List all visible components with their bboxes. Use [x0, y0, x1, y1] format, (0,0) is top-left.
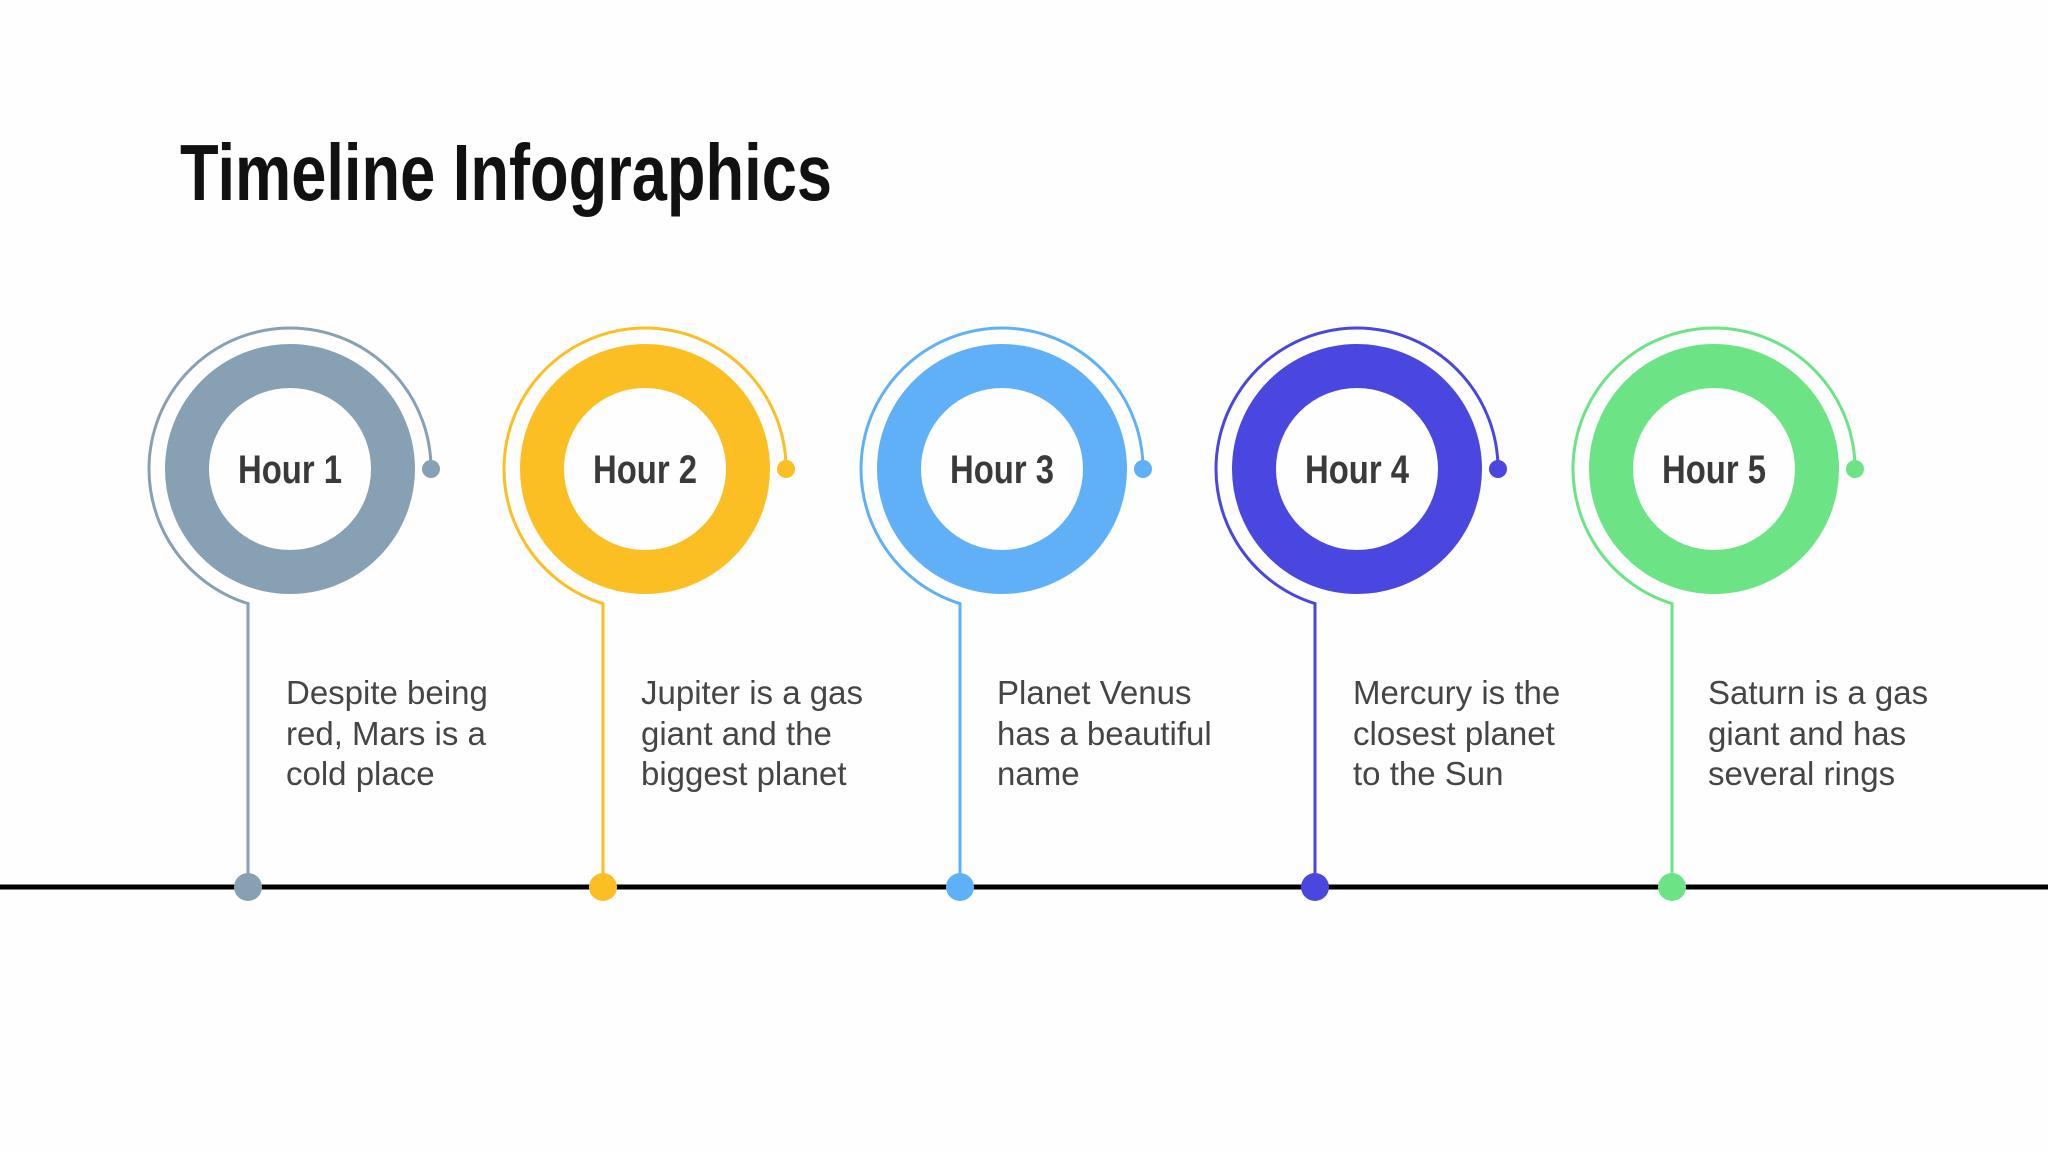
step: hour 3: has a beautiful: [997, 715, 1212, 752]
step: hour 1: cold place: [286, 755, 435, 792]
step: hour 4: [1216, 328, 1560, 901]
step: hour 2: Hour 2: [593, 448, 697, 492]
step: hour 4: to the Sun: [1353, 755, 1503, 792]
step: hour 1: Despite being: [286, 674, 488, 711]
step: hour 4: closest planet: [1353, 715, 1555, 752]
step: hour 2: Jupiter is a gas: [641, 674, 863, 711]
step: hour 5: giant and has: [1708, 715, 1906, 752]
step: hour 1: [149, 328, 488, 901]
title: Timeline Infographics: [180, 128, 832, 217]
step: hour 4: Hour 4: [1305, 448, 1410, 492]
step: hour 1: red, Mars is a: [286, 715, 487, 752]
step: hour 5: [1573, 328, 1928, 901]
timeline axis: [0, 884, 2048, 890]
step: hour 4: Mercury is the: [1353, 674, 1560, 711]
step: hour 5: Hour 5: [1662, 448, 1766, 492]
step: hour 1: Hour 1: [238, 448, 342, 492]
step: hour 3: Hour 3: [950, 448, 1054, 492]
step: hour 2: [504, 328, 863, 901]
step: hour 2: giant and the: [641, 715, 832, 752]
step: hour 2: biggest planet: [641, 755, 846, 792]
step: hour 3: Planet Venus: [997, 674, 1192, 711]
step: hour 5: Saturn is a gas: [1708, 674, 1928, 711]
step: hour 3: name: [997, 755, 1080, 792]
step: hour 5: several rings: [1708, 755, 1895, 792]
step: hour 3: [861, 328, 1212, 901]
